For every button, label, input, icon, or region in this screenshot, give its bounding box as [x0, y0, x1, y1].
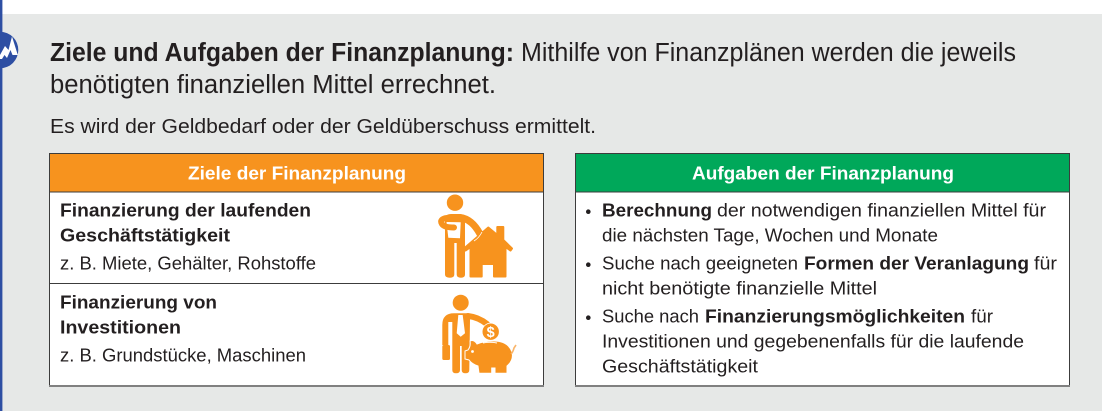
- bullet: Finanzierungsmöglichkeiten: Finanzierungsmöglichkeiten: [705, 306, 965, 327]
- text: laufende Geschäftstätigkeit: Geschäftstätigkeit: [60, 225, 230, 246]
- heading: [50, 39, 1016, 99]
- bullet: Finanzierungsmöglichkeiten: für: [971, 306, 993, 327]
- bullet: Formen der Veranlagung: für: [1034, 253, 1057, 274]
- bullet: Formen der Veranlagung: [586, 253, 1057, 299]
- panel header: Aufgaben: [576, 154, 1070, 192]
- intro text: Es wird der Geldbedarf oder der Geldüberschuss ermittelt.: [50, 115, 596, 138]
- text: laufende Geschäftstätigkeit: [60, 200, 316, 274]
- bullet: Formen der Veranlagung: Suche nach geeigneten: [602, 253, 798, 274]
- bullet: Finanzierungsmöglichkeiten: Geschäftstätigkeit: [602, 356, 758, 377]
- text: Investitionen: Investitionen: [60, 317, 181, 338]
- icon: person with piggy bank: [442, 295, 516, 373]
- bullet: Berechnung: Berechnung: [602, 200, 712, 221]
- icon: blue margin bar with logo: [0, 0, 18, 411]
- heading: Mithilfe von Finanzplänen werden die jeweils: [521, 39, 1016, 67]
- bullet: Formen der Veranlagung: Formen der Veranlagung: [804, 253, 1029, 274]
- bullet: Berechnung: [586, 200, 1046, 246]
- bullet: Berechnung: der notwendigen finanziellen Mittel für: [717, 200, 1046, 221]
- text: Investitionen: z. B. Grundstücke, Maschinen: [60, 345, 306, 366]
- heading: Ziele und Aufgaben der Finanzplanung:: [50, 39, 514, 67]
- icon: person with piggy bank: $: [487, 325, 495, 341]
- panel: Aufgaben der Finanzplanung: [575, 154, 1070, 386]
- text: laufende Geschäftstätigkeit: z. B. Miete, Gehälter, Rohstoffe: [60, 253, 316, 274]
- text: laufende Geschäftstätigkeit: Finanzierung der laufenden: [60, 200, 311, 221]
- bullet: Finanzierungsmöglichkeiten: Investitionen und gegebenenfalls für die laufende: [602, 331, 1024, 352]
- panel header: Ziele: [50, 154, 544, 192]
- heading: benötigten finanziellen Mittel errechnet.: [50, 71, 496, 99]
- bullet: Berechnung: die nächsten Tage, Wochen und Monate: [602, 225, 938, 246]
- text: Investitionen: [60, 292, 306, 366]
- panel header: Aufgaben: Aufgaben der Finanzplanung: [692, 162, 954, 184]
- bullet: Finanzierungsmöglichkeiten: [586, 306, 1024, 377]
- panel header: Ziele: Ziele der Finanzplanung: [188, 162, 406, 184]
- bullet: Finanzierungsmöglichkeiten: Suche nach: [602, 306, 699, 327]
- icon: person with house: [441, 194, 512, 278]
- panel: Ziele der Finanzplanung: [49, 154, 544, 386]
- text: Investitionen: Finanzierung von: [60, 292, 217, 313]
- bullet: Formen der Veranlagung: nicht benötigte finanzielle Mittel: [602, 278, 877, 299]
